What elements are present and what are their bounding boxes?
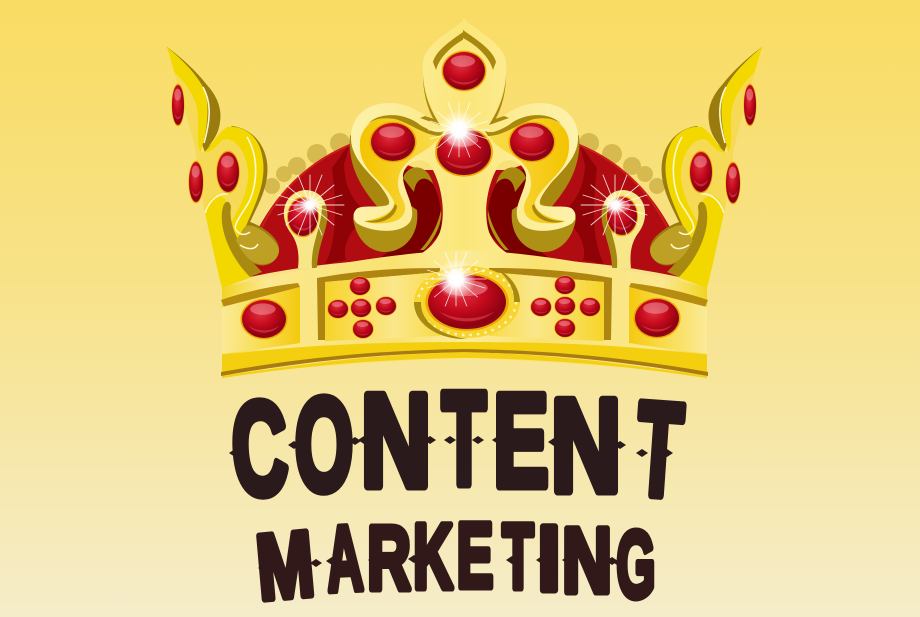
title: MARKETING: R [367,509,411,609]
title: CONTENT: O [295,371,353,518]
title: MARKETING: K [413,506,453,609]
title: CONTENT: C [228,373,291,524]
title: MARKETING [253,505,656,617]
rubies [172,51,756,339]
crown centre plate [414,266,520,339]
title: MARKETING: M [253,513,318,617]
title: MARKETING: N [562,509,612,612]
crown right half [463,18,762,378]
title: CONTENT: N [551,372,621,519]
title: MARKETING: T [502,505,534,608]
title: MARKETING: E [457,505,493,608]
title: CONTENT [228,365,687,525]
crown illustration [167,18,762,378]
sparkles [276,103,649,306]
title: CONTENT: T [442,365,486,513]
title: MARKETING: G [616,512,656,617]
crown left half [167,18,466,378]
title: MARKETING: A [324,506,365,611]
title: MARKETING: I [537,507,561,610]
title: CONTENT: N [361,367,431,514]
title: CONTENT: E [493,368,549,515]
title: CONTENT: T [631,374,687,525]
